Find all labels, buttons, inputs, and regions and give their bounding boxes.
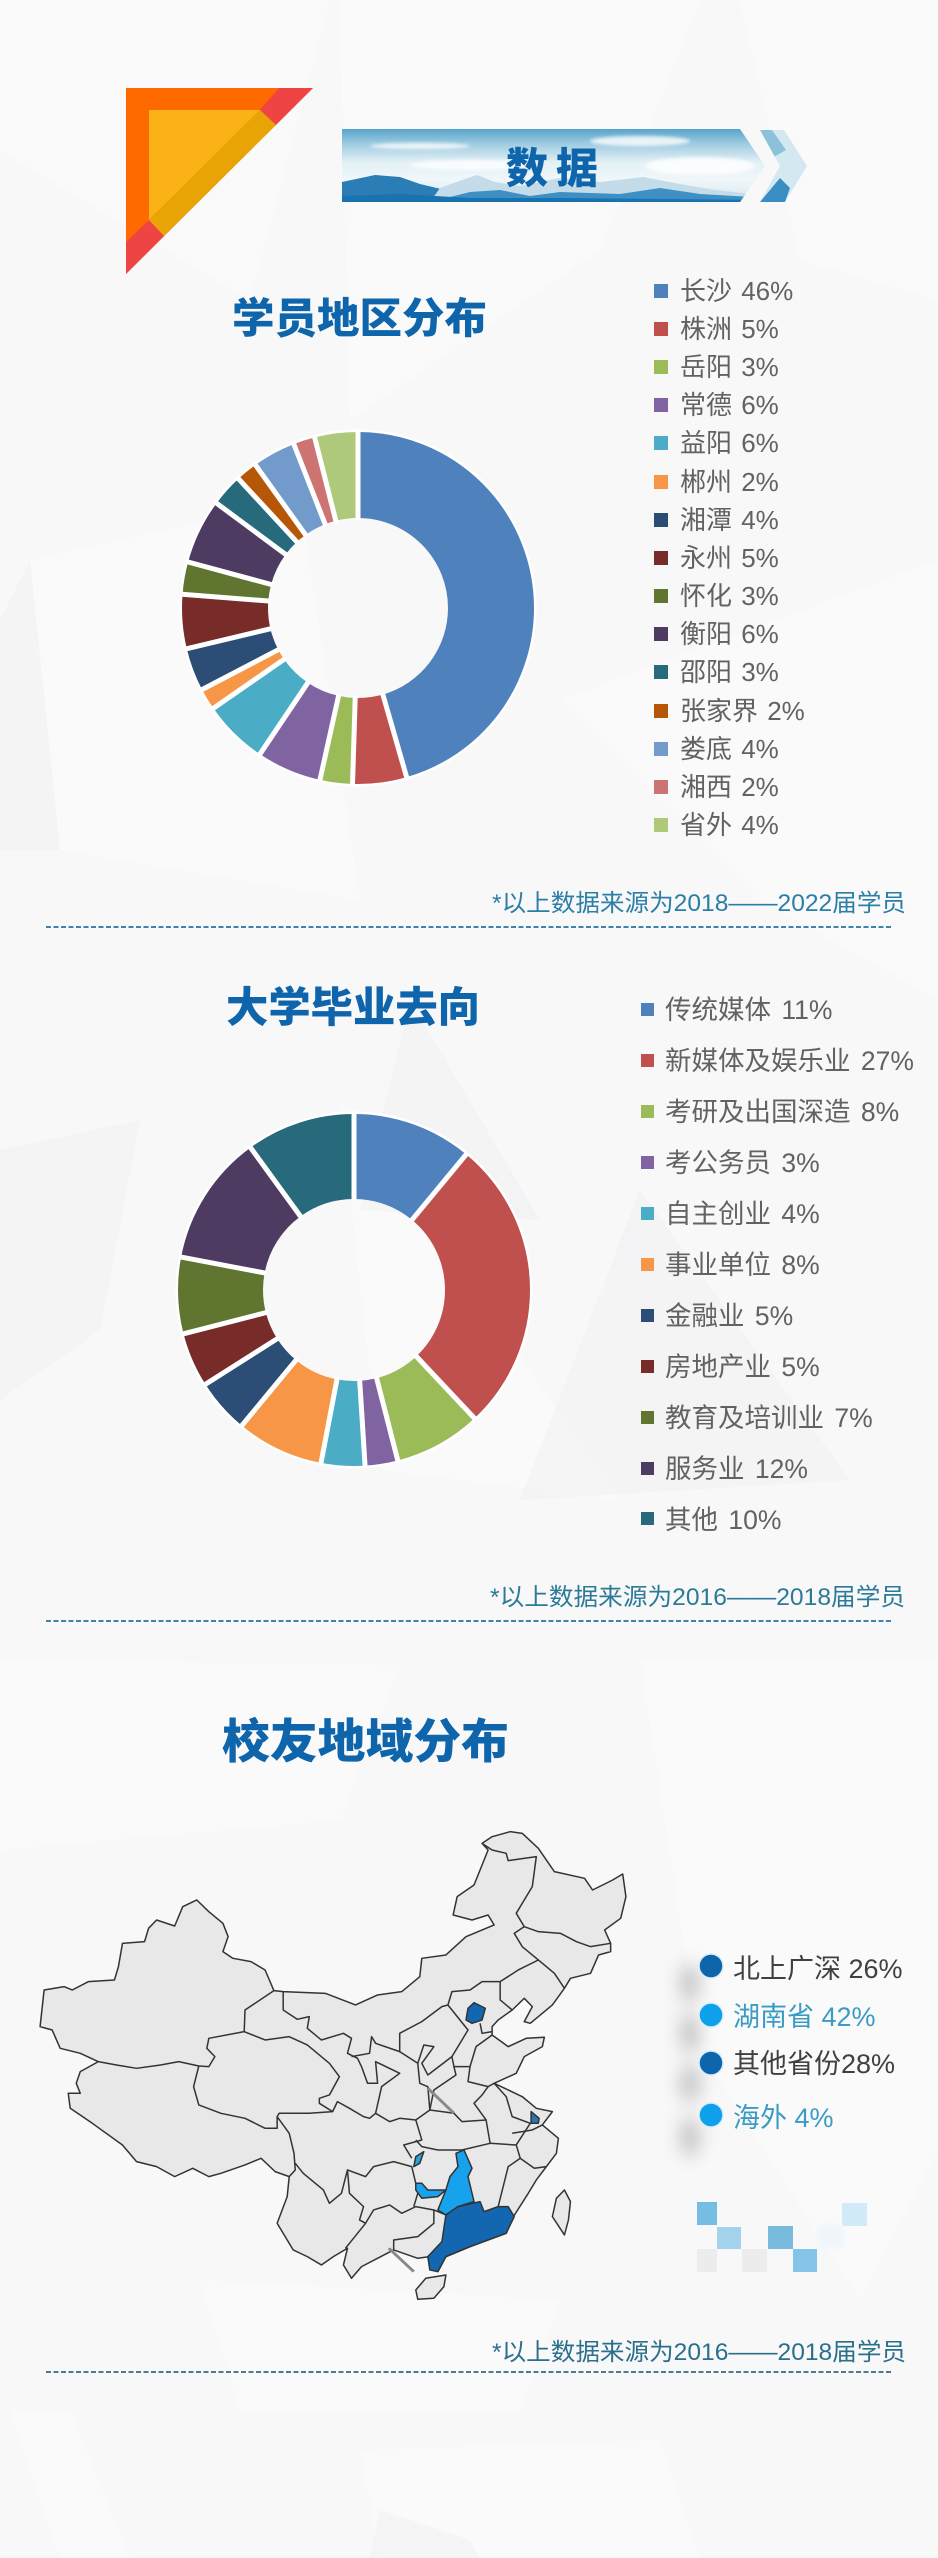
legend item: 永州: 永州 5% (680, 543, 779, 573)
slice: 郴州 2% (225, 475, 491, 741)
slice: 新媒体及娱乐业 27% (220, 1156, 488, 1424)
donut chart: graduate destinations (177, 1112, 531, 1468)
province: Chongqing area (416, 2183, 446, 2198)
legend item: 教育及培训业: 教育及培训业 7% (665, 1403, 873, 1433)
province: northern Hunan sliver (414, 2152, 424, 2167)
slice: 常德 6% (225, 475, 491, 741)
legend: graduate destinations (641, 995, 914, 1535)
slice: 传统媒体 11% (220, 1156, 488, 1424)
slice: 岳阳 3% (225, 475, 491, 741)
legend item: 湖南省: 湖南省 42% (733, 2002, 876, 2032)
slice: 房地产业 5% (220, 1156, 488, 1424)
legend item: 金融业: 金融业 5% (665, 1301, 793, 1331)
slice: 教育及培训业 7% (220, 1156, 488, 1424)
slice: 怀化 3% (225, 475, 491, 741)
slice: 永州 5% (225, 475, 491, 741)
legend item: 娄底: 娄底 4% (680, 734, 779, 764)
legend item: 新媒体及娱乐业: 新媒体及娱乐业 27% (665, 1046, 914, 1076)
donut chart: student regions (181, 430, 535, 786)
slice: 益阳 6% (225, 475, 491, 741)
slice: 湘潭 4% (225, 475, 491, 741)
footnote: section 1 source: *以上数据来源为2018——2022届学员 (492, 890, 906, 917)
island: Taiwan (552, 2190, 570, 2235)
province: Hunan (438, 2150, 474, 2215)
legend item: 邵阳: 邵阳 3% (680, 657, 779, 687)
banner heading: 数据 (506, 145, 598, 192)
legend item: 郴州: 郴州 2% (680, 467, 779, 497)
slice: 株洲 5% (225, 475, 491, 741)
legend item: 长沙: 长沙 46% (680, 276, 793, 306)
decorative pixel squares (697, 2202, 867, 2272)
legend item: 张家界: 张家界 2% (680, 696, 805, 726)
legend item: 湘西: 湘西 2% (680, 772, 779, 802)
heading: 学员地区分布: 学员地区分布 (232, 295, 487, 342)
legend: alumni regions (699, 1954, 903, 2133)
legend item: 益阳: 益阳 6% (680, 428, 779, 458)
heading: 大学毕业去向: 大学毕业去向 (226, 984, 480, 1031)
slice: 考研及出国深造 8% (220, 1156, 488, 1424)
legend item: 考研及出国深造: 考研及出国深造 8% (665, 1097, 899, 1127)
legend item: 岳阳: 岳阳 3% (680, 352, 779, 382)
legend item: 省外: 省外 4% (680, 810, 779, 840)
slice: 考公务员 3% (220, 1156, 488, 1424)
legend item: 湘潭: 湘潭 4% (680, 505, 779, 535)
legend item: 传统媒体: 传统媒体 11% (665, 995, 832, 1025)
slice: 张家界 2% (225, 475, 491, 741)
slice: 湘西 2% (225, 475, 491, 741)
slice: 娄底 4% (225, 475, 491, 741)
legend item: 房地产业: 房地产业 5% (665, 1352, 820, 1382)
legend item: 其他: 其他 10% (665, 1505, 781, 1535)
province: Guangdong (428, 2202, 514, 2272)
province: Beijing (466, 2003, 485, 2023)
legend item: 自主创业: 自主创业 4% (665, 1199, 820, 1229)
slice: 事业单位 8% (220, 1156, 488, 1424)
legend item: 其他省份: 其他省份28% (733, 2049, 895, 2079)
heading: 校友地域分布: 校友地域分布 (222, 1715, 509, 1768)
slice: 衡阳 6% (225, 475, 491, 741)
legend item: 常德: 常德 6% (680, 390, 779, 420)
slice: 长沙 46% (225, 475, 491, 741)
slice: 其他 10% (220, 1156, 488, 1424)
island: Hainan (416, 2275, 446, 2299)
banner: mountain arrow (342, 129, 810, 203)
legend item: 考公务员: 考公务员 3% (665, 1148, 820, 1178)
province: Shanghai (531, 2112, 539, 2123)
legend item: 怀化: 怀化 3% (680, 581, 779, 611)
legend item: 海外: 海外 4% (733, 2103, 834, 2133)
slice: 自主创业 4% (220, 1156, 488, 1424)
legend item: 服务业: 服务业 12% (665, 1454, 808, 1484)
legend item: 衡阳: 衡阳 6% (680, 619, 779, 649)
slice: 邵阳 3% (225, 475, 491, 741)
corner triangle emblem (126, 88, 313, 274)
slice: 金融业 5% (220, 1156, 488, 1424)
legend: student regions (654, 276, 805, 840)
footnote: section 3 source: *以上数据来源为2016——2018届学员 (492, 2339, 906, 2366)
map of China (40, 1832, 626, 2299)
legend item: 株洲: 株洲 5% (680, 314, 779, 344)
legend item: 北上广深: 北上广深 26% (733, 1954, 903, 1984)
legend item: 事业单位: 事业单位 8% (665, 1250, 820, 1280)
slice: 服务业 12% (220, 1156, 488, 1424)
footnote: section 2 source: *以上数据来源为2016——2018届学员 (490, 1584, 905, 1611)
slice: 省外 4% (225, 475, 491, 741)
